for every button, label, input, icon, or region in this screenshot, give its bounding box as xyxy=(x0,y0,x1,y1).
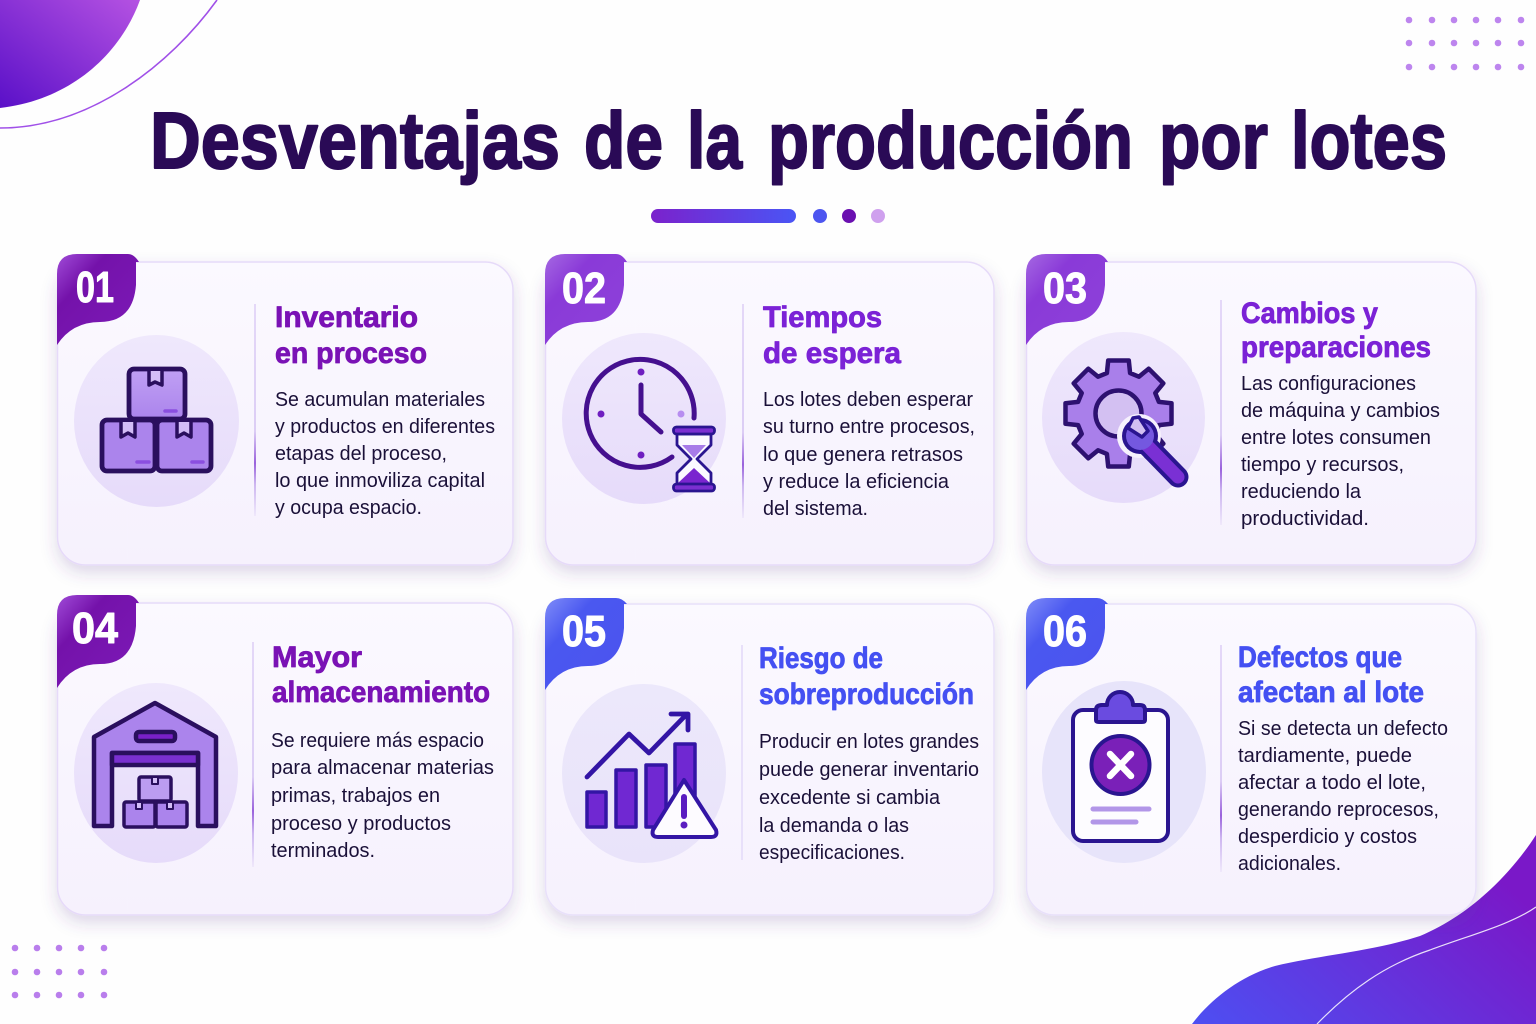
body text: la demanda o las xyxy=(759,815,909,837)
heading: Inventario xyxy=(275,301,418,334)
body text: puede generar inventario xyxy=(759,759,979,781)
body text: su turno entre procesos, xyxy=(763,416,975,438)
title: por xyxy=(1159,96,1268,185)
panel: 04 Mayor almacenamiento xyxy=(57,595,513,915)
heading: sobreproducción xyxy=(759,678,974,711)
panel: 04 Mayor almacenamiento: 04 xyxy=(72,604,118,653)
icon: stacked boxes xyxy=(102,369,211,471)
body text: Los lotes deben esperar xyxy=(763,389,973,411)
heading: Tiempos xyxy=(763,301,882,334)
body text: desperdicio y costos xyxy=(1238,826,1417,848)
body text: Producir en lotes grandes xyxy=(759,731,979,753)
heading: afectan al lote xyxy=(1238,676,1424,709)
body text xyxy=(1241,373,1440,530)
title: lotes xyxy=(1291,96,1447,185)
body text: excedente si cambia xyxy=(759,787,941,809)
panel: 06 Defectos que afectan al lote xyxy=(1026,598,1476,915)
icon: clock and hourglass xyxy=(586,359,714,491)
body text: primas, trabajos en xyxy=(271,785,440,807)
body text xyxy=(1238,718,1448,875)
heading xyxy=(1241,297,1431,364)
title: producción xyxy=(768,96,1133,185)
body text: Se acumulan materiales xyxy=(275,389,485,411)
heading xyxy=(272,641,490,709)
body text: para almacenar materias xyxy=(271,757,494,779)
body text: Si se detecta un defecto xyxy=(1238,718,1448,740)
panel: 01 Inventario en proceso: 01 xyxy=(76,263,114,312)
decoration: top-right dot grid xyxy=(1406,17,1524,70)
panel: 05 Riesgo de sobreproducción xyxy=(545,598,994,915)
body text: reduciendo la xyxy=(1241,481,1362,503)
panel: 03 Cambios y preparaciones: 03 xyxy=(1043,264,1087,313)
body text xyxy=(759,731,979,864)
body text: proceso y productos xyxy=(271,813,451,835)
title xyxy=(150,96,1447,185)
heading xyxy=(763,301,901,370)
body text: y productos en diferentes xyxy=(275,416,495,438)
body text: terminados. xyxy=(271,840,375,862)
heading xyxy=(275,301,427,370)
body text: de máquina y cambios xyxy=(1241,400,1440,422)
body text: Las configuraciones xyxy=(1241,373,1416,395)
body text: productividad. xyxy=(1241,508,1369,530)
heading: Riesgo de xyxy=(759,642,883,675)
title accent: bar and three dots xyxy=(651,209,885,223)
decoration: bottom-left dot grid xyxy=(12,945,107,998)
heading: preparaciones xyxy=(1241,331,1431,364)
body text: adicionales. xyxy=(1238,853,1341,875)
body text: etapas del proceso, xyxy=(275,443,447,465)
heading xyxy=(1238,641,1424,709)
panel: 01 Inventario en proceso xyxy=(57,254,513,565)
heading: Mayor xyxy=(272,641,362,674)
body text: lo que genera retrasos xyxy=(763,444,963,466)
heading: Cambios y xyxy=(1241,297,1378,330)
title: la xyxy=(687,96,742,185)
decoration: top-left corner blob xyxy=(0,0,217,128)
body text: lo que inmoviliza capital xyxy=(275,470,485,492)
heading xyxy=(759,642,974,711)
body text xyxy=(763,389,975,520)
heading: en proceso xyxy=(275,337,427,370)
icon: clipboard with error mark xyxy=(1073,692,1168,841)
body text: entre lotes consumen xyxy=(1241,427,1431,449)
panel: 02 Tiempos de espera: 02 xyxy=(562,264,606,313)
body text: Se requiere más espacio xyxy=(271,730,484,752)
body text: generando reprocesos, xyxy=(1238,799,1439,821)
body text: y reduce la eficiencia xyxy=(763,471,950,493)
panel: 03 Cambios y preparaciones xyxy=(1026,254,1476,565)
body text: afectar a todo el lote, xyxy=(1238,772,1426,794)
decoration: bottom-right wave xyxy=(1192,835,1536,1024)
body text: especificaciones. xyxy=(759,842,905,864)
panel: 06 Defectos que afectan al lote: 06 xyxy=(1043,607,1087,656)
body text xyxy=(275,389,495,519)
icon: warehouse xyxy=(94,703,216,827)
panel: 02 Tiempos de espera xyxy=(545,254,994,565)
body text xyxy=(271,730,494,862)
icon: gear and wrench xyxy=(1066,360,1178,477)
icon: rising bar chart with warning triangle xyxy=(587,714,716,837)
body text: del sistema. xyxy=(763,498,868,520)
title: de xyxy=(584,96,663,185)
panel: 05 Riesgo de sobreproducción: 05 xyxy=(562,607,606,656)
body text: tiempo y recursos, xyxy=(1241,454,1404,476)
heading: Defectos que xyxy=(1238,641,1402,674)
heading: almacenamiento xyxy=(272,676,490,709)
heading: de espera xyxy=(763,337,901,370)
body text: y ocupa espacio. xyxy=(275,497,422,519)
title: Desventajas xyxy=(150,96,560,185)
body text: tardiamente, puede xyxy=(1238,745,1412,767)
